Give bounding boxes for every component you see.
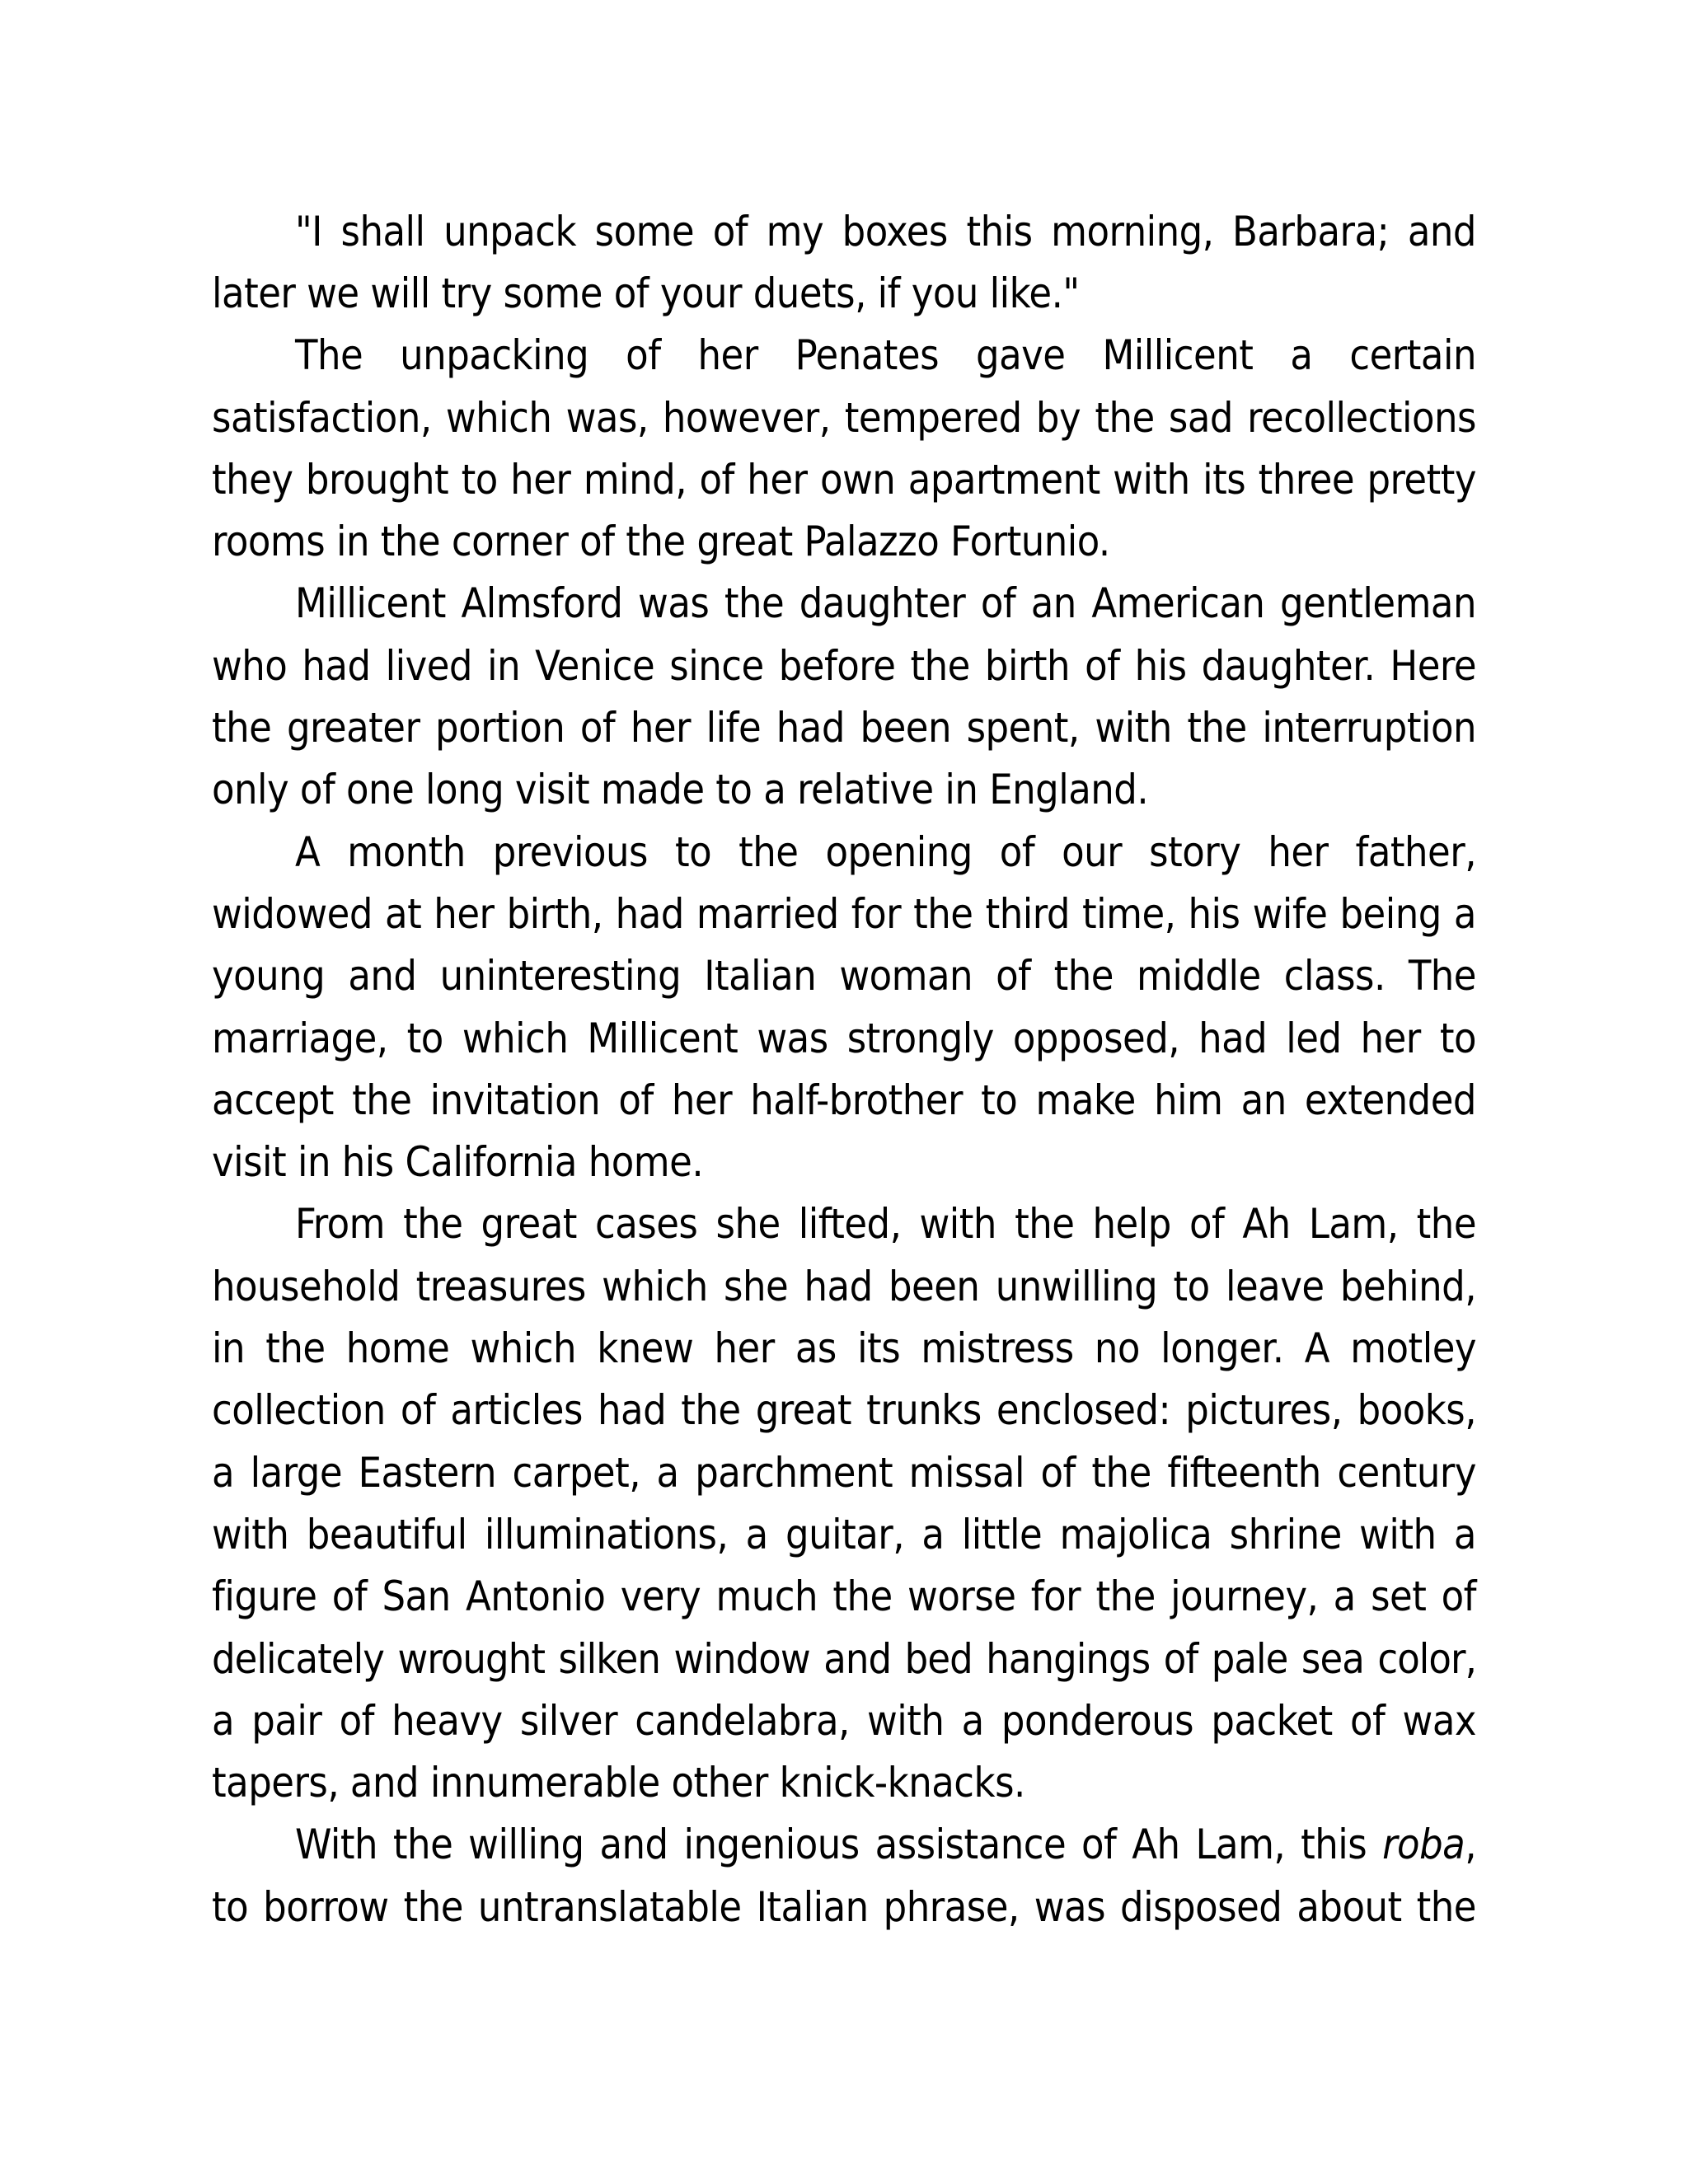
paragraph: father's third marriage: widowed at her birth, had married for the third time, his wife being a (212, 890, 1476, 938)
paragraph: assistance of Ah Lam: to borrow the untranslatable Italian phrase, was disposed about the (212, 1883, 1476, 1931)
paragraph: father's third marriage: visit in his California home. (212, 1138, 703, 1186)
paragraph: unpack boxes dialogue: "I shall unpack some of my boxes this morning, Barbara; and (295, 208, 1476, 255)
paragraph: household treasures: collection of articles had the great trunks enclosed: pictures, books, (212, 1386, 1476, 1434)
paragraph: father's third marriage: marriage, to which Millicent was strongly opposed, had led her to (212, 1015, 1476, 1062)
paragraph: Millicent Almsford background: the greater portion of her life had been spent, with the interruption (212, 704, 1476, 752)
paragraph: household treasures: household treasures which she had been unwilling to leave behind, (212, 1263, 1476, 1310)
paragraph: assistance of Ah Lam: With the willing and ingenious assistance of Ah Lam, this roba, (295, 1821, 1476, 1868)
paragraph: Millicent Almsford background: who had lived in Venice since before the birth of his daughter. Here (212, 642, 1476, 690)
paragraph: unpacking her Penates: The unpacking of her Penates gave Millicent a certain (295, 331, 1476, 379)
paragraph: household treasures (212, 1200, 1477, 1807)
paragraph: Millicent Almsford background: Millicent Almsford was the daughter of an American gentleman (295, 579, 1476, 627)
text page (212, 208, 1477, 1931)
paragraph: household treasures: figure of San Antonio very much the worse for the journey, a set of (212, 1572, 1476, 1620)
paragraph: household treasures: delicately wrought silken window and bed hangings of pale sea color, (212, 1635, 1476, 1683)
paragraph: unpacking her Penates: they brought to her mind, of her own apartment with its three pretty (212, 456, 1476, 504)
paragraph: unpacking her Penates (212, 331, 1476, 565)
paragraph: unpack boxes dialogue (212, 208, 1476, 317)
paragraph: assistance of Ah Lam (212, 1821, 1476, 1931)
paragraph: father's third marriage: young and uninteresting Italian woman of the middle class. The (212, 952, 1476, 1000)
paragraph: unpacking her Penates: satisfaction, which was, however, tempered by the sad recollections (212, 394, 1476, 442)
paragraph: household treasures: From the great cases she lifted, with the help of Ah Lam, the (295, 1200, 1476, 1248)
paragraph: father's third marriage (212, 828, 1476, 1186)
paragraph: household treasures: a large Eastern carpet, a parchment missal of the fifteenth century (212, 1449, 1476, 1497)
paragraph: household treasures: in the home which knew her as its mistress no longer. A motley (212, 1324, 1476, 1372)
paragraph: father's third marriage: A month previous to the opening of our story her father, (295, 828, 1476, 876)
paragraph: household treasures: a pair of heavy silver candelabra, with a ponderous packet of wax (212, 1697, 1476, 1745)
paragraph: household treasures: tapers, and innumerable other knick-knacks. (212, 1759, 1025, 1807)
paragraph: father's third marriage: accept the invitation of her half-brother to make him an extended (212, 1076, 1476, 1124)
paragraph: Millicent Almsford background: only of one long visit made to a relative in England. (212, 766, 1148, 813)
paragraph: household treasures: with beautiful illuminations, a guitar, a little majolica shrine with a (212, 1511, 1476, 1558)
paragraph: Millicent Almsford background (212, 579, 1476, 813)
paragraph: unpack boxes dialogue: later we will try some of your duets, if you like." (212, 269, 1080, 317)
paragraph: unpacking her Penates: rooms in the corner of the great Palazzo Fortunio. (212, 518, 1110, 565)
